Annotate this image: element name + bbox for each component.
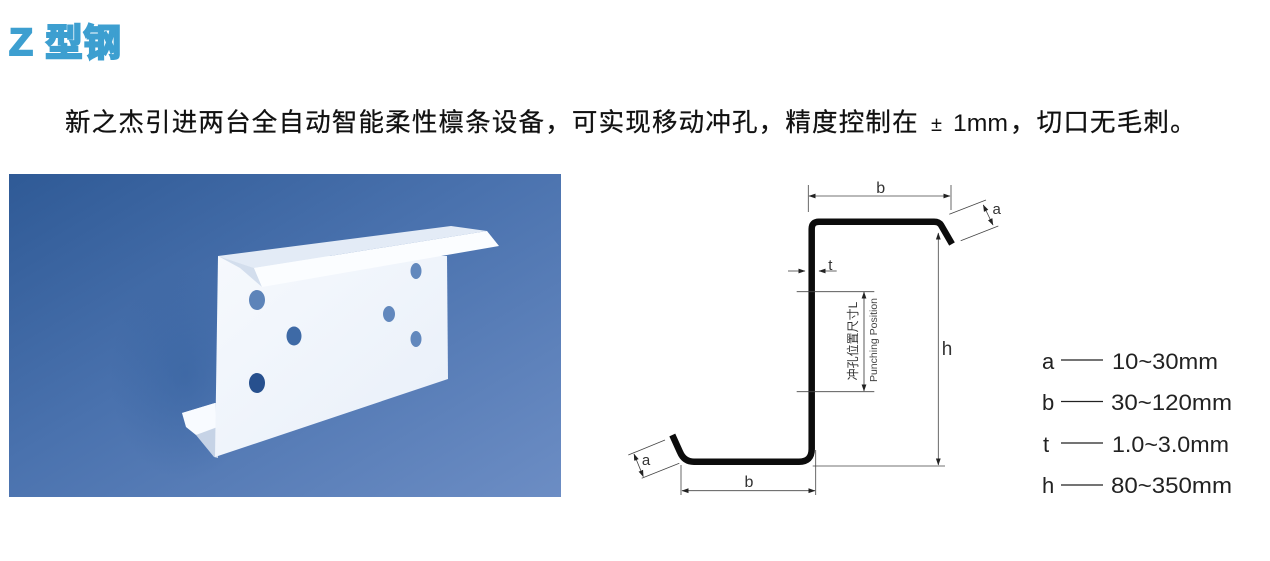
lower flange <box>182 403 218 458</box>
title: Z <box>9 22 33 64</box>
legend row a <box>1042 349 1218 374</box>
legend row h <box>1042 473 1232 498</box>
steel section outline <box>672 222 952 462</box>
dimension: h: h <box>942 339 952 360</box>
dimension: bottom b <box>681 450 816 495</box>
dimension: top a: a <box>993 201 1002 218</box>
legend row h: h <box>1042 473 1054 498</box>
dimension: punching position: Punching Position <box>868 298 880 382</box>
title <box>9 22 121 65</box>
dimension: top b: b <box>876 180 885 197</box>
web with holes <box>215 256 448 457</box>
dimension: punching position <box>797 292 880 392</box>
intro text: 1mm <box>953 110 1008 137</box>
intro text: ，切口无毛刺。 <box>1010 109 1197 137</box>
dimension: top a <box>949 200 1002 241</box>
legend row t: t <box>1043 432 1049 457</box>
intro text: 新之杰引进两台全自动智能柔性檩条设备，可实现移动冲孔，精度控制在 <box>65 109 919 137</box>
dimension: bottom a <box>628 440 679 478</box>
legend row a: a <box>1042 349 1055 374</box>
dimension: t <box>788 257 837 274</box>
legend row a: 10~30mm <box>1112 349 1218 374</box>
dimension: t: t <box>828 257 833 274</box>
title: 型钢 <box>45 23 121 65</box>
diagram: Z section profile <box>628 180 1002 495</box>
dimension: bottom a: a <box>642 452 651 469</box>
legend row h: 80~350mm <box>1111 473 1232 498</box>
legend row t <box>1043 432 1229 457</box>
legend row b: 30~120mm <box>1111 390 1232 415</box>
upper flange <box>218 226 499 287</box>
dimension: bottom b: b <box>745 474 754 491</box>
legend: dimension ranges <box>1042 349 1232 498</box>
dimension: punching position: 冲孔位置尺寸L <box>845 301 860 380</box>
intro text: ± <box>931 114 942 136</box>
legend row b <box>1042 390 1232 415</box>
legend row b: b <box>1042 390 1054 415</box>
legend row t: 1.0~3.0mm <box>1112 432 1229 457</box>
panel: product photo <box>9 174 561 497</box>
